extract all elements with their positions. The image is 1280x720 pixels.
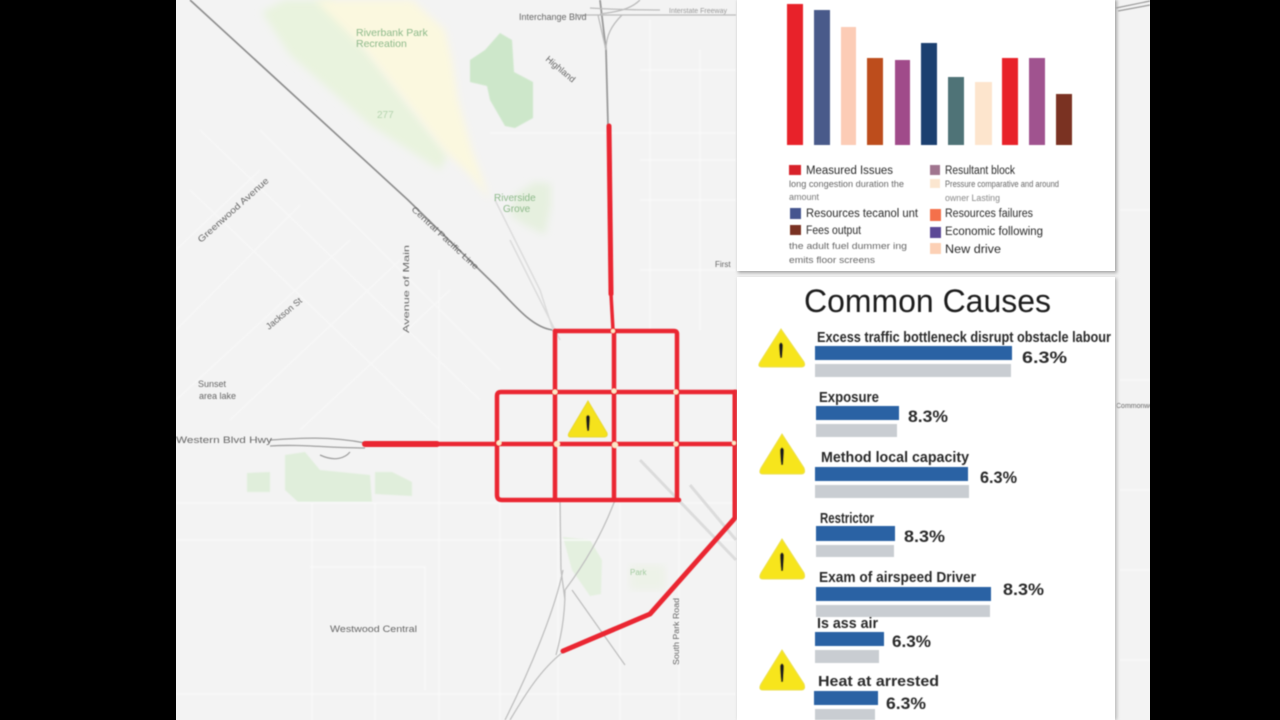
map: place labels: Commonwealth (1116, 403, 1165, 410)
map: place labels (176, 8, 1165, 665)
chart legend: Resources tecanol unt (806, 208, 919, 220)
icon: warning triangle 2 (760, 434, 805, 474)
cause row 1 (815, 330, 1111, 377)
map: place labels: Recreation (356, 38, 407, 50)
cause row 2 (816, 390, 948, 437)
map background (176, 0, 1165, 720)
chart legend: the adult fuel dummer ing (789, 241, 907, 251)
cause row 6: 6.3% (892, 632, 931, 651)
chart legend: Resources failures (945, 208, 1033, 220)
heading: Common Causes: Common Causes (804, 283, 1051, 319)
chart legend (789, 165, 1059, 265)
icon: warning triangle 3 (760, 539, 805, 579)
map: place labels: Highland (544, 54, 577, 84)
cause row 5: 8.3% (1003, 580, 1044, 599)
cause row 1: 6.3% (1022, 348, 1067, 367)
map: park areas (247, 0, 665, 596)
map: place labels: Grove (503, 204, 531, 215)
cause row 3: Method local capacity (821, 450, 969, 466)
cause row 4: 8.3% (904, 527, 945, 546)
cause row 3: 6.3% (980, 468, 1017, 487)
cause row 6: Is ass air (817, 616, 878, 632)
cause row 4: Restrictor (820, 511, 874, 527)
panel: bar chart shadow (738, 0, 1117, 273)
map: place labels: Western Blvd Hwy (176, 435, 273, 445)
map: place labels: Jackson St (264, 295, 304, 332)
icon: map warning triangle (568, 401, 607, 437)
chart legend: emits floor screens (789, 255, 876, 265)
cause row 2: 8.3% (908, 407, 948, 426)
map: place labels: Interstate Freeway (669, 8, 727, 15)
map: place labels: 277 (377, 110, 394, 121)
map: place labels: Park (630, 568, 647, 577)
chart legend: Resultant block (945, 165, 1015, 177)
panel: common causes (737, 277, 1115, 720)
chart legend: Fees output (806, 225, 862, 237)
icon: warning triangle 4 (760, 650, 805, 690)
map: place labels: Sunset (198, 379, 227, 389)
chart legend: Pressure comparative and around (945, 179, 1059, 189)
bar chart (787, 4, 1072, 145)
map: place labels: area lake (199, 391, 236, 401)
map: place labels: Central Pacific Line (410, 205, 481, 272)
chart legend: owner Lasting (945, 193, 1000, 203)
map: place labels: Riverbank Park (356, 27, 429, 39)
cause row 5 (816, 570, 1044, 617)
map: highways (190, 0, 736, 720)
chart legend: Measured Issues (806, 165, 893, 177)
cause row 7: 6.3% (886, 694, 926, 713)
chart legend: amount (789, 192, 819, 202)
chart legend: Economic following (945, 226, 1043, 238)
map: place labels: Greenwood Avenue (196, 175, 271, 244)
map: highway fragment right of panels (1116, 1, 1150, 11)
map: place labels: Westwood Central (330, 624, 417, 634)
map: red congested route network (365, 126, 737, 651)
map: place labels: Avenue of Main (402, 245, 411, 333)
cause row 5: Exam of airspeed Driver (819, 570, 976, 586)
cause row 6 (815, 616, 931, 663)
cause row 4 (816, 511, 945, 557)
map: place labels: Interchange Blvd (519, 12, 587, 22)
panel: bar chart (737, 0, 1115, 271)
cause row 2: Exposure (819, 390, 879, 406)
panel: common causes shadow (738, 278, 1117, 720)
cause row 1: Excess traffic bottleneck disrupt obstacle labour (817, 330, 1111, 346)
chart legend: New drive (945, 244, 1001, 256)
cause row 7 (814, 674, 939, 720)
chart legend: long congestion duration the (789, 179, 904, 189)
cause row 7: Heat at arrested (818, 674, 939, 690)
icon: warning triangle 1 (759, 329, 805, 367)
map: place labels: First (715, 260, 731, 269)
map: street grid (176, 20, 1150, 720)
cause row 3 (815, 450, 1017, 498)
map: place labels: Riverside (494, 193, 536, 204)
map: place labels: South Park Road (672, 598, 681, 665)
